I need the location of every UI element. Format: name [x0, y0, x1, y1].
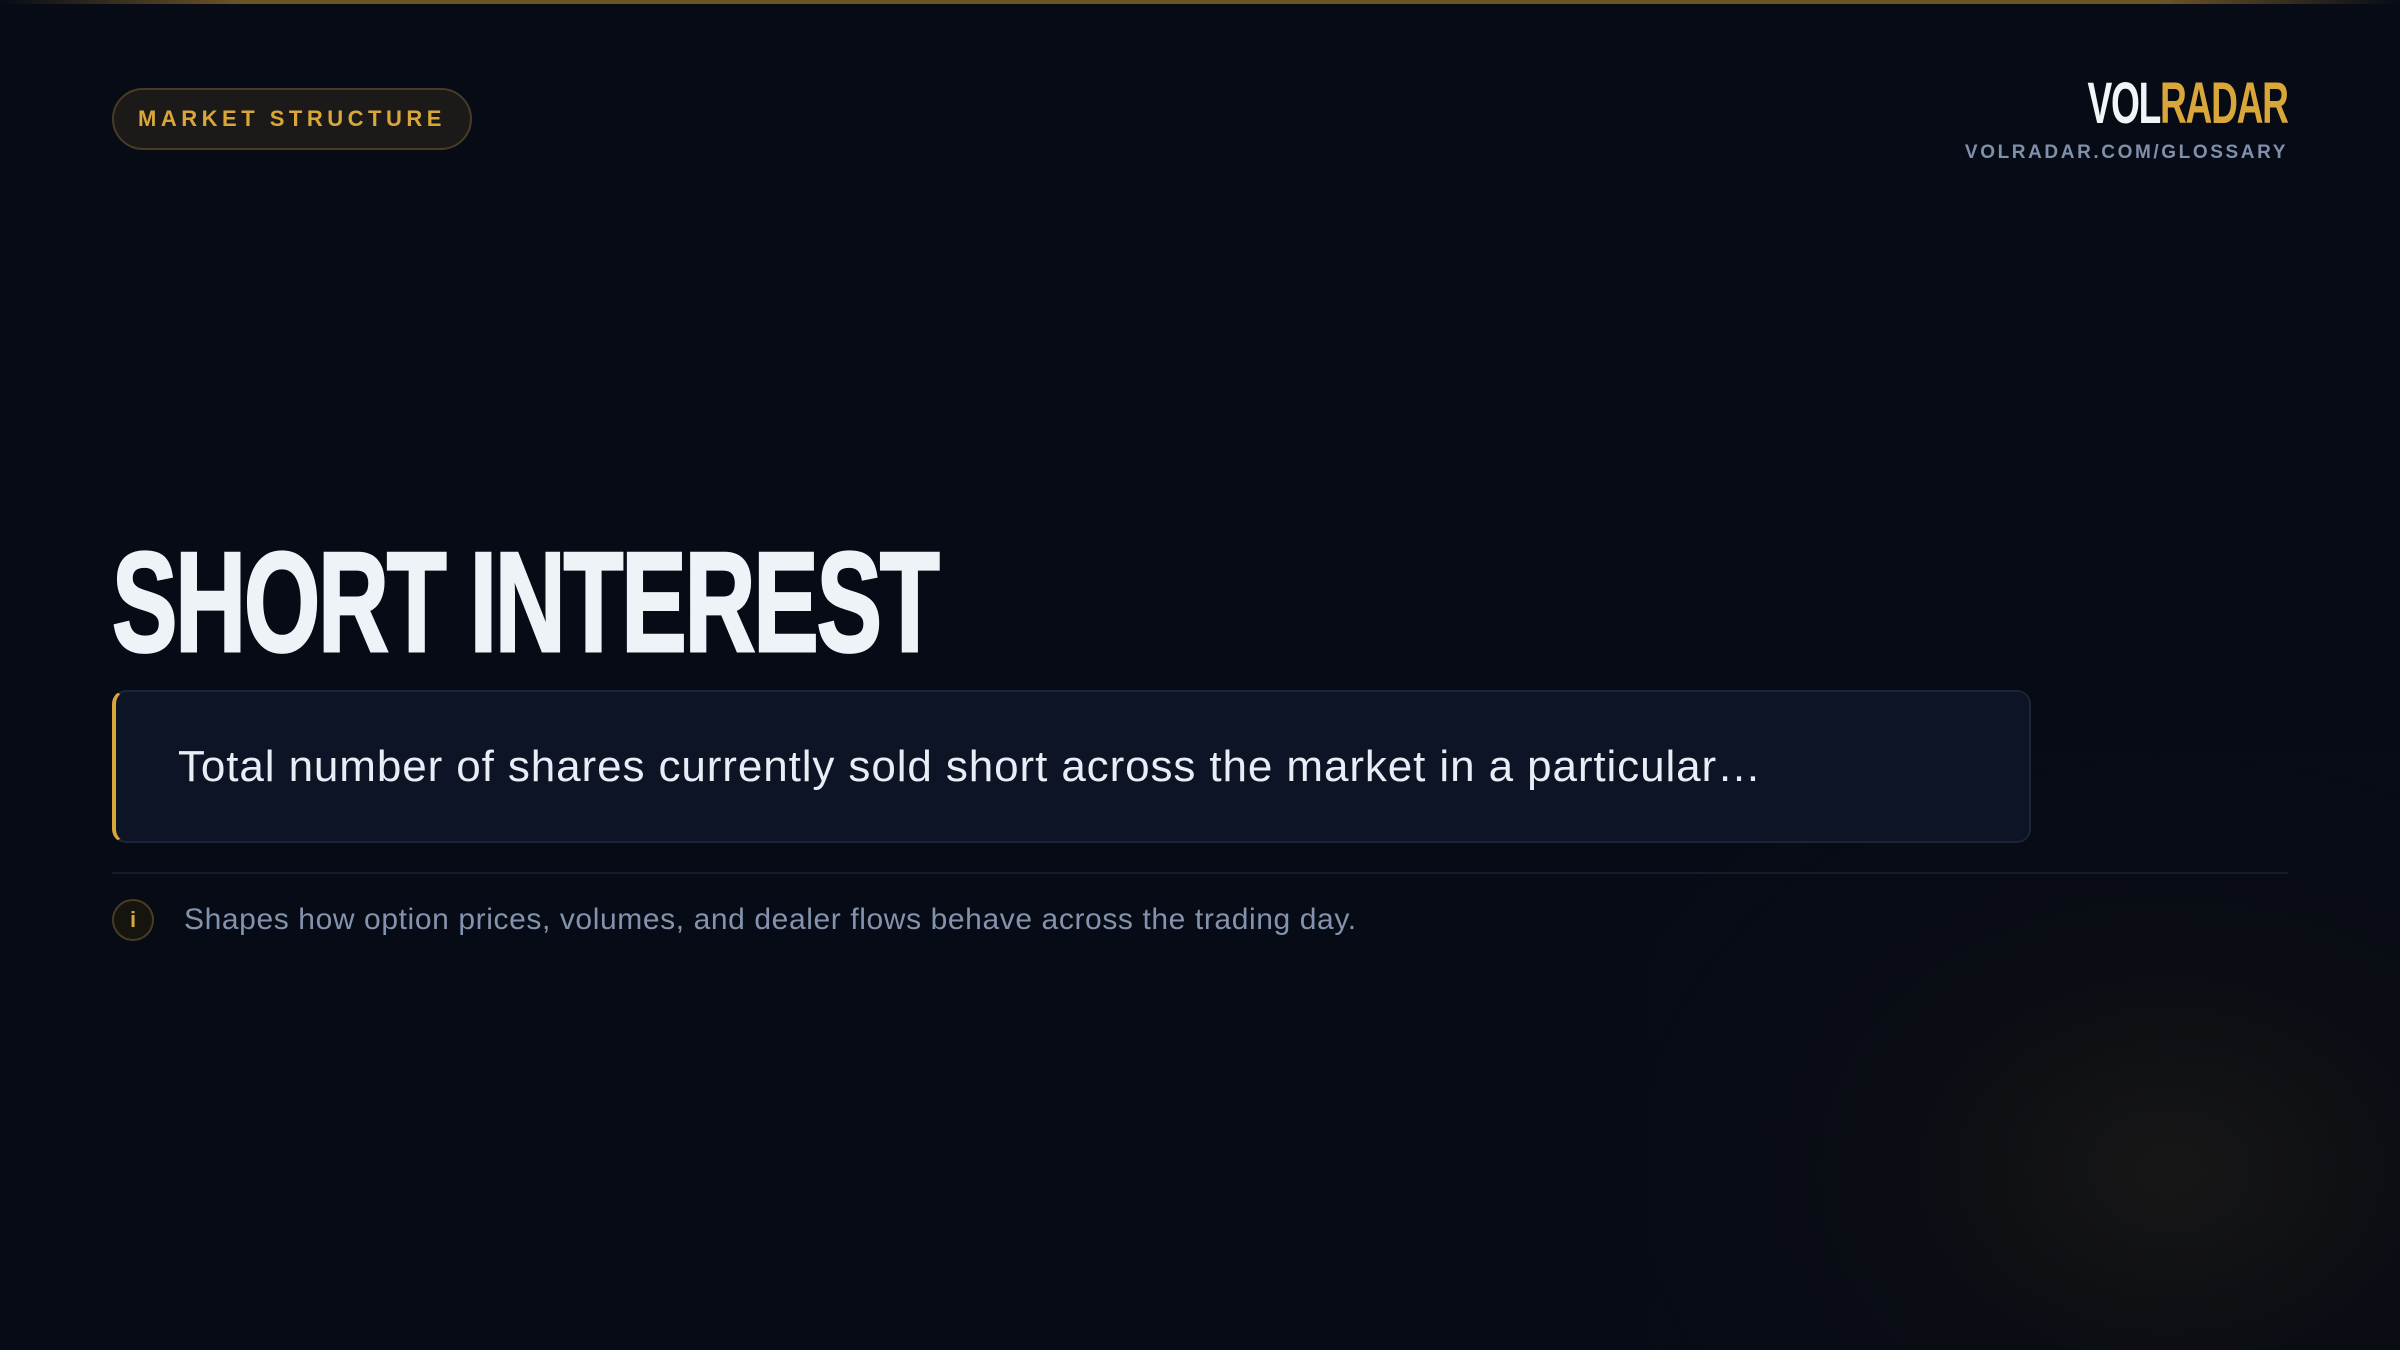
logo wordmark: VOLRADAR	[2088, 71, 2288, 136]
logo url: VOLRADAR.COM/GLOSSARY	[1965, 142, 2288, 163]
note text: Shapes how option prices, volumes, and dealer flows behave across the trading day.	[184, 903, 1357, 936]
definition box	[112, 690, 2031, 843]
icon: info: i	[130, 907, 136, 932]
category pill	[112, 88, 472, 150]
logo	[1965, 71, 2288, 163]
definition box: Total number of shares currently sold short across the market in a particular…	[178, 742, 1762, 791]
title: SHORT INTEREST	[112, 523, 938, 682]
icon: info	[112, 899, 154, 941]
category pill: MARKET STRUCTURE	[138, 106, 446, 131]
note	[112, 899, 1357, 941]
